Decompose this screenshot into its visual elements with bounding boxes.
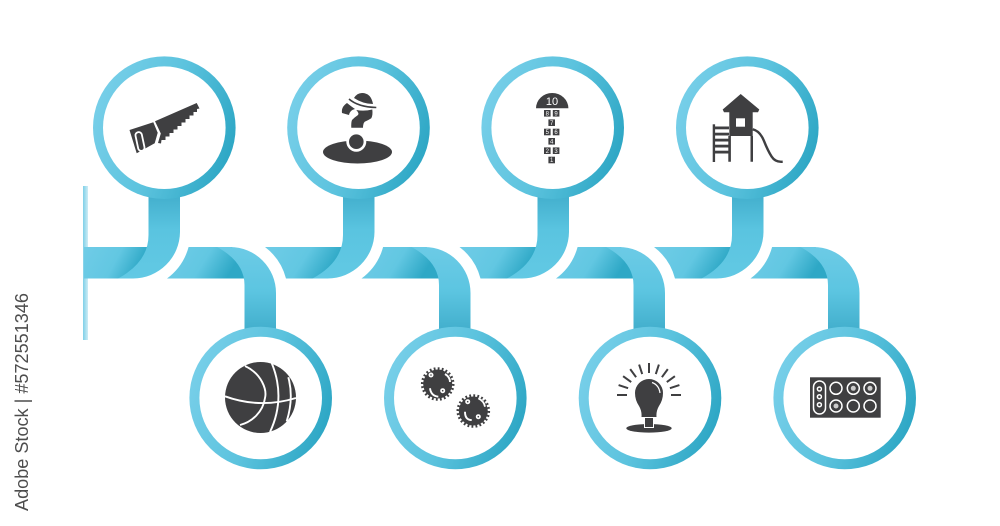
ring: germs bbox=[384, 327, 527, 469]
ring: hopscotch bbox=[481, 56, 624, 199]
icon: hopscotch: 5 bbox=[546, 130, 550, 136]
icon: hopscotch: 9 bbox=[554, 111, 558, 117]
icon: germs bbox=[422, 369, 489, 426]
icon: hopscotch: 2 bbox=[546, 149, 550, 155]
ring: basketball bbox=[189, 327, 332, 469]
icon: pill blister pack bbox=[810, 377, 881, 418]
connector band: segment 1 bbox=[84, 190, 276, 335]
icon: hopscotch: 4 bbox=[550, 139, 554, 145]
vertical stock id text: Adobe Stock | #572551346 bbox=[12, 293, 32, 511]
icon: light bulb bbox=[617, 363, 681, 433]
icon: basketball bbox=[225, 362, 296, 433]
icon: playground house with slide bbox=[713, 94, 783, 162]
start bar bbox=[83, 186, 88, 340]
ring: pill blister bbox=[773, 327, 916, 469]
connector band: segment 4 bbox=[654, 190, 860, 335]
icon: saw bbox=[130, 103, 200, 153]
icon: hopscotch: 10 bbox=[546, 96, 558, 108]
icon: question mark on hole bbox=[323, 93, 392, 164]
icon: hopscotch: 6 bbox=[554, 130, 558, 136]
icon: hopscotch: 3 bbox=[554, 149, 558, 155]
icon: hopscotch: 1 bbox=[550, 158, 554, 164]
icon: hopscotch bbox=[536, 93, 568, 164]
connector band: segment 3 bbox=[460, 190, 665, 335]
icon: hopscotch: 8 bbox=[546, 111, 550, 117]
ring: saw bbox=[93, 56, 236, 199]
connector band: segment 2 bbox=[265, 190, 470, 335]
ring: light bulb bbox=[579, 327, 721, 469]
icon: hopscotch: 7 bbox=[550, 121, 554, 127]
ring: question mark bbox=[287, 56, 430, 199]
ring: playground bbox=[676, 56, 819, 199]
